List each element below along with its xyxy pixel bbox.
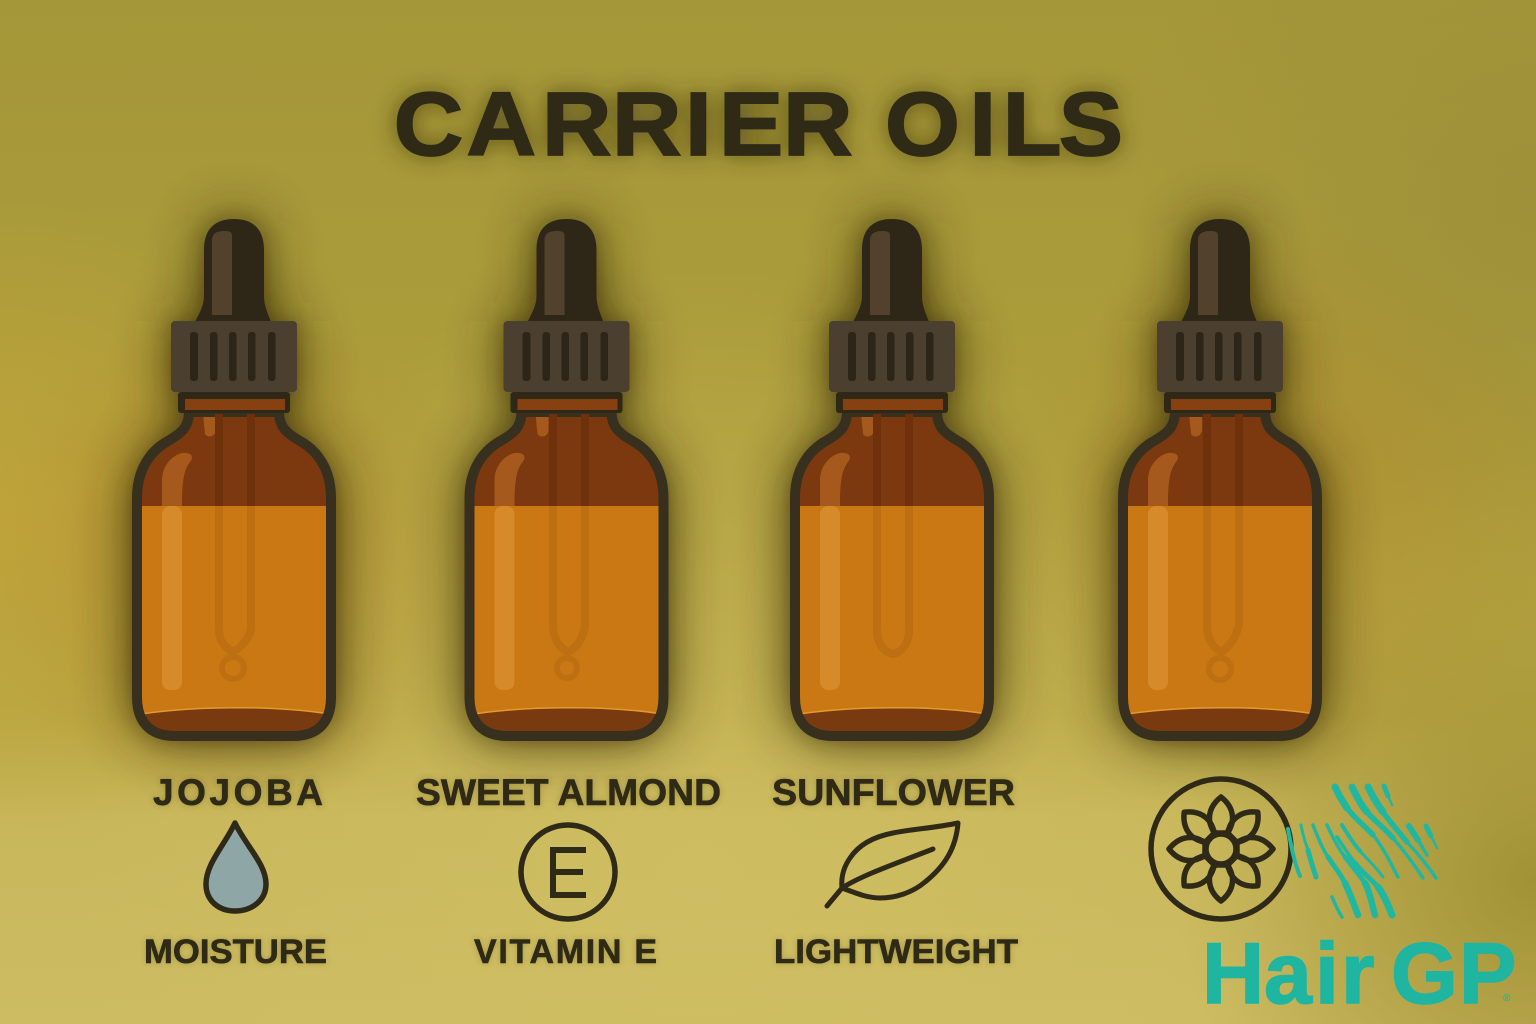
bottle halos tight [132,219,1322,741]
icon: vitamin E [521,825,615,919]
bottle: jojoba [130,219,340,746]
logo: Hair GP wordmark: Hair GP [1202,926,1516,1022]
bottle: fourth [1116,219,1326,746]
label: lightweight: LIGHTWEIGHT [774,933,1018,971]
icon: flower [1151,779,1291,919]
dropper tube: fourth [1207,414,1239,680]
bottle: sweet almond [462,219,672,746]
dropper tube: sweet almond [553,414,585,678]
title: CARRIER OILS [394,74,1123,174]
label: vitamin E: VITAMIN E [474,933,657,971]
icon: water drop [206,823,266,911]
logo: registered mark: ® [1503,993,1511,1004]
label: sunflower: SUNFLOWER [772,772,1015,813]
label: moisture: MOISTURE [144,933,327,971]
logo: hair strands [1288,786,1437,917]
bottle: sunflower [788,219,998,746]
dropper tube: sunflower [877,414,909,654]
dropper tube: jojoba [219,414,251,679]
bottle halos wide [132,219,1322,741]
icon: leaf [827,823,958,906]
label: jojoba: JOJOBA [153,772,323,813]
label: sweet almond: SWEET ALMOND [416,772,721,813]
